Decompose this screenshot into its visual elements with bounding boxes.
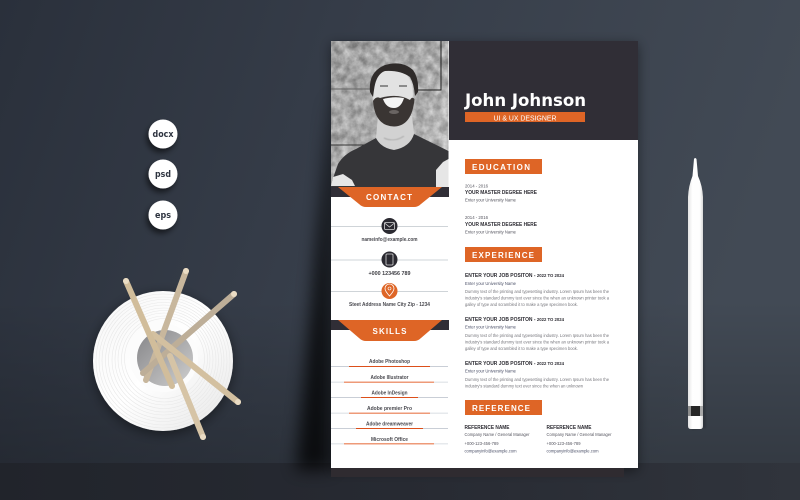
contact: address: [331, 283, 448, 308]
job entry 1: [465, 273, 609, 308]
contact heading: [331, 187, 449, 207]
reference 1: +000-123-456-789: [464, 441, 499, 447]
skill: premier Pro: [331, 406, 448, 414]
skill: Illustrator: Adobe Illustrator: [370, 375, 409, 381]
resume sheet: [331, 41, 638, 477]
job entry 3: industry's standard dummy text ever since the when an unknown: [465, 383, 583, 389]
reference 1: REFERENCE NAME: [464, 425, 510, 431]
skill: Microsoft Office: Microsoft Office: [371, 437, 408, 443]
badge: docx: docx: [152, 130, 174, 140]
education heading: [465, 159, 542, 174]
chin highlight: [389, 110, 399, 114]
beard: [373, 96, 414, 126]
skills heading: [331, 320, 449, 341]
education entry 1: 2014 - 2016: [465, 184, 488, 190]
job entry 2: [465, 317, 609, 352]
education entry 2: YOUR MASTER DEGREE HERE: [465, 222, 537, 228]
skill: InDesign: [331, 390, 448, 398]
job entry 3: Dummy text of the printing and typesetting industry. Lorem Ipsum has been the: [465, 377, 609, 383]
reference heading: [465, 400, 542, 415]
experience heading: [465, 247, 542, 262]
shirt: [331, 134, 448, 187]
reference 2: companyinfo@example.com: [546, 448, 599, 454]
job entry 2: Dummy text of the printing and typesetting industry. Lorem Ipsum has been the: [465, 333, 609, 339]
job title bar: [465, 112, 585, 122]
education entry 1: YOUR MASTER DEGREE HERE: [465, 190, 537, 196]
vase with wooden sticks: [93, 268, 241, 440]
hair: [370, 63, 418, 97]
reference 2: +000-123-456-789: [546, 441, 581, 447]
job entry 1: industry's standard dummy text ever since the when an unknown printer took a: [465, 295, 609, 301]
reference 2: Company Name / General Manager: [546, 432, 612, 438]
reference 1: companyinfo@example.com: [464, 448, 517, 454]
header panel: [449, 41, 638, 140]
skill: premier Pro: Adobe premier Pro: [367, 406, 413, 412]
reference 2: [546, 425, 612, 454]
job entry 3: Enter your University Name: [465, 369, 516, 375]
skill: Microsoft Office: [331, 437, 448, 444]
reference 2: REFERENCE NAME: [546, 425, 592, 431]
photo of laughing man: [331, 41, 448, 187]
name: John Johnson: [464, 91, 586, 110]
contact: phone: +000 123456 789: [368, 271, 410, 277]
icon: phone: [382, 252, 398, 268]
education entry 2: [465, 215, 537, 236]
education entry 1: [465, 184, 537, 204]
contact: email: [331, 218, 448, 243]
job entry 1: Dummy text of the printing and typesetting industry. Lorem Ipsum has been the: [465, 289, 609, 295]
badge: psd: psd: [155, 170, 171, 180]
reference 1: [464, 425, 530, 454]
sticks: [126, 271, 238, 437]
skill: Illustrator: [331, 375, 448, 383]
face: [372, 67, 414, 121]
job entry 2: ENTER YOUR JOB POSITON - 2022 TO 2024: [465, 317, 564, 323]
eyes: [380, 85, 407, 87]
skill: Photoshop: [331, 359, 448, 367]
stylus pencil: [688, 158, 706, 430]
smile: [383, 97, 404, 108]
neck: [376, 116, 414, 150]
job entry 1: galley of type and scrambled it to make a type specimen book.: [465, 302, 578, 308]
badge: eps: eps: [155, 211, 171, 221]
skill: dreamweaver: Adobe dreamweaver: [366, 422, 414, 428]
contact heading: CONTACT: [366, 193, 412, 202]
job entry 3: [465, 361, 609, 389]
job entry 1: Enter your University Name: [465, 281, 516, 287]
skill: dreamweaver: [331, 422, 448, 429]
education entry 1: Enter your University Name: [465, 198, 516, 204]
hands: [331, 174, 355, 186]
job entry 2: Enter your University Name: [465, 324, 516, 330]
education entry 2: 2014 - 2016: [465, 215, 488, 221]
floor band: [0, 463, 800, 500]
education heading: EDUCATION: [472, 163, 530, 172]
skills heading: SKILLS: [372, 327, 407, 336]
icon: location pin: [382, 283, 398, 299]
skill: InDesign: Adobe InDesign: [372, 390, 408, 396]
job entry 3: ENTER YOUR JOB POSITON - 2022 TO 2024: [465, 361, 564, 367]
reference heading: REFERENCE: [472, 404, 531, 413]
education entry 2: Enter your University Name: [465, 230, 516, 236]
job entry 2: galley of type and scrambled it to make a type specimen book.: [465, 346, 578, 352]
reference 1: Company Name / General Manager: [464, 432, 530, 438]
contact: phone: [331, 252, 448, 277]
job title bar: UI & UX DESIGNER: [494, 113, 557, 122]
icon: envelope: [382, 218, 398, 234]
experience heading: EXPERIENCE: [472, 251, 535, 260]
format badges: [148, 120, 178, 230]
contact: email: nameinfo@example.com: [362, 237, 418, 243]
job entry 1: ENTER YOUR JOB POSITON - 2022 TO 2024: [465, 273, 564, 279]
job entry 2: industry's standard dummy text ever since the when an unknown printer took a: [465, 339, 609, 345]
contact: address: Steet Address Name City Zip - 1234: [349, 302, 430, 308]
skill: Photoshop: Adobe Photoshop: [369, 359, 411, 365]
